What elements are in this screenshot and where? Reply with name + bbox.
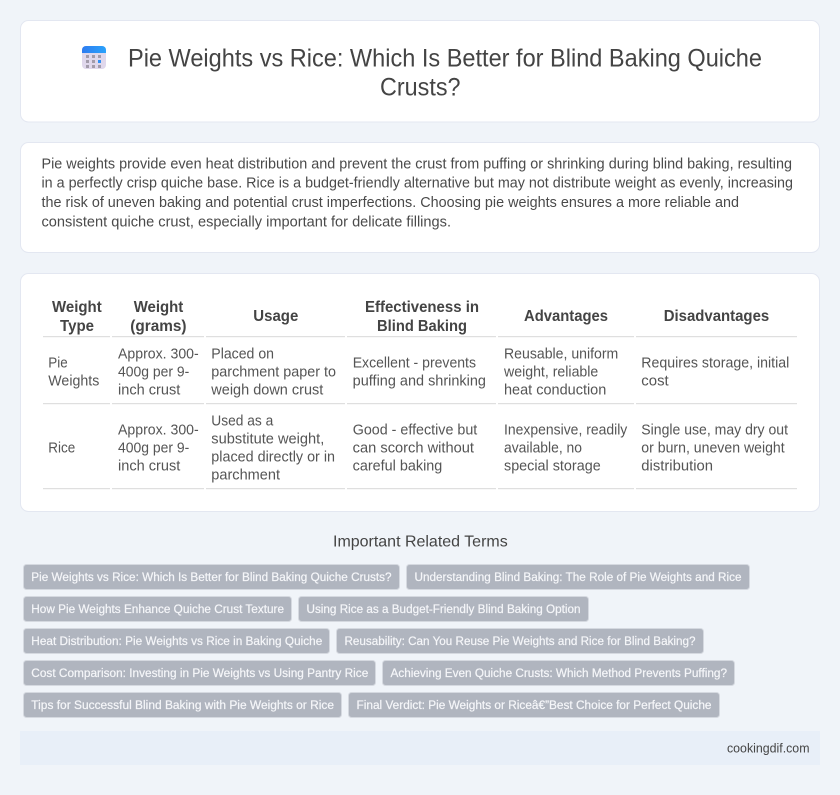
tag 9: Tips for Successful Blind Baking with Pie Weights or Rice bbox=[31, 698, 334, 712]
intro text: Pie weights provide even heat distribution and prevent the crust from puffing or shrinking during blind baking, resulting bbox=[42, 156, 792, 172]
table header row: Disadvantages bbox=[664, 308, 769, 325]
intro text: consistent quiche crust, especially important for delicate fillings. bbox=[42, 214, 451, 230]
tag 5 bbox=[24, 628, 330, 654]
tag 10 bbox=[348, 692, 720, 718]
title: Pie Weights vs Rice: Which Is Better for Blind Baking Quiche bbox=[128, 44, 762, 72]
table row: pie weights: Approx. 300- bbox=[118, 346, 199, 362]
tag 9 bbox=[24, 692, 342, 718]
footer source text: cookingdif.com bbox=[727, 740, 810, 756]
table row: rice: available, no bbox=[504, 440, 582, 456]
title: Crusts? bbox=[380, 74, 460, 102]
tag 4: Using Rice as a Budget-Friendly Blind Baking Option bbox=[306, 602, 581, 616]
table row: pie weights: 400g per 9- bbox=[118, 364, 190, 380]
table row: rice: or burn, uneven weight bbox=[641, 440, 785, 456]
table header row: Weight bbox=[52, 299, 102, 316]
tag 3: How Pie Weights Enhance Quiche Crust Texture bbox=[31, 602, 284, 616]
table row: rice: can scorch without bbox=[353, 440, 474, 456]
table row: pie weights: cost bbox=[641, 373, 669, 389]
table row: rice: careful baking bbox=[353, 458, 442, 474]
tag 7: Cost Comparison: Investing in Pie Weights vs Using Pantry Rice bbox=[31, 666, 368, 680]
related terms tags bbox=[24, 564, 750, 718]
intro text: in a perfectly crisp quiche base. Rice is a budget-friendly alternative but may not distribute weight as evenly, increasing bbox=[42, 176, 793, 192]
table row: rice: inch crust bbox=[118, 458, 180, 474]
table header row bbox=[52, 299, 769, 335]
table row: pie weights: puffing and shrinking bbox=[353, 373, 486, 389]
table row: pie weights: inch crust bbox=[118, 382, 180, 398]
table row: pie weights: heat conduction bbox=[504, 382, 606, 398]
tag 2: Understanding Blind Baking: The Role of Pie Weights and Rice bbox=[414, 570, 742, 584]
tag 5: Heat Distribution: Pie Weights vs Rice in Baking Quiche bbox=[31, 634, 322, 648]
tag 4 bbox=[298, 596, 588, 622]
table row: rice: Used as a bbox=[211, 413, 273, 429]
table row: pie weights: Pie bbox=[48, 355, 68, 371]
title bbox=[128, 44, 762, 102]
table row: pie weights: Requires storage, initial bbox=[641, 355, 789, 371]
table header row: Advantages bbox=[524, 308, 608, 325]
table row: pie weights: parchment paper to bbox=[211, 364, 336, 380]
table header row: Blind Baking bbox=[377, 318, 467, 335]
table row: rice: Inexpensive, readily bbox=[504, 422, 628, 438]
panel: introduction bbox=[20, 142, 820, 252]
table row: pie weights bbox=[48, 346, 789, 398]
intro text bbox=[42, 156, 793, 230]
table header row: Type bbox=[60, 318, 94, 335]
table row: rice: Rice bbox=[48, 440, 75, 456]
table row: rice: substitute weight, bbox=[211, 431, 324, 447]
tag 7 bbox=[24, 660, 376, 686]
table row: rice: Approx. 300- bbox=[118, 422, 199, 438]
table header row: Effectiveness in bbox=[365, 299, 479, 316]
tag 6 bbox=[336, 628, 704, 654]
table row: pie weights: Reusable, uniform bbox=[504, 346, 618, 362]
table row: pie weights: Excellent - prevents bbox=[353, 355, 476, 371]
footer bbox=[20, 731, 820, 765]
table row: pie weights: weigh down crust bbox=[210, 382, 323, 398]
tag 1 bbox=[24, 564, 400, 590]
table row: rice: Good - effective but bbox=[353, 422, 477, 438]
table row: rice: placed directly or in bbox=[211, 449, 335, 465]
tag 1: Pie Weights vs Rice: Which Is Better for Blind Baking Quiche Crusts? bbox=[31, 570, 392, 584]
tag 3 bbox=[24, 596, 292, 622]
table row: rice: parchment bbox=[211, 467, 280, 483]
table row: pie weights: Placed on bbox=[211, 346, 274, 362]
table header row: Weight bbox=[134, 299, 184, 316]
table row: pie weights: Weights bbox=[48, 373, 99, 389]
tag 8 bbox=[382, 660, 734, 686]
tag 10: Final Verdict: Pie Weights or Riceâ€”Best Choice for Perfect Quiche bbox=[356, 698, 712, 712]
panel: header bbox=[20, 20, 820, 122]
table row: rice: distribution bbox=[641, 458, 713, 474]
intro text: the risk of uneven baking and potential crust imperfections. Choosing pie weights ensures a more reliable and bbox=[42, 195, 739, 211]
table row: rice: 400g per 9- bbox=[118, 440, 190, 456]
heading: important related terms: Important Related Terms bbox=[333, 534, 508, 550]
table row: rice: special storage bbox=[504, 458, 601, 474]
table row: pie weights: weight, reliable bbox=[503, 364, 598, 380]
table header row: Usage bbox=[253, 308, 298, 325]
table row: rice: Single use, may dry out bbox=[641, 422, 788, 438]
panel: comparison table bbox=[20, 274, 820, 512]
table row: rice bbox=[48, 413, 788, 483]
tag 8: Achieving Even Quiche Crusts: Which Method Prevents Puffing? bbox=[390, 666, 727, 680]
tag 2 bbox=[406, 564, 750, 590]
icon: calendar bbox=[82, 46, 106, 69]
table header row: (grams) bbox=[130, 318, 186, 335]
tag 6: Reusability: Can You Reuse Pie Weights and Rice for Blind Baking? bbox=[344, 634, 696, 648]
